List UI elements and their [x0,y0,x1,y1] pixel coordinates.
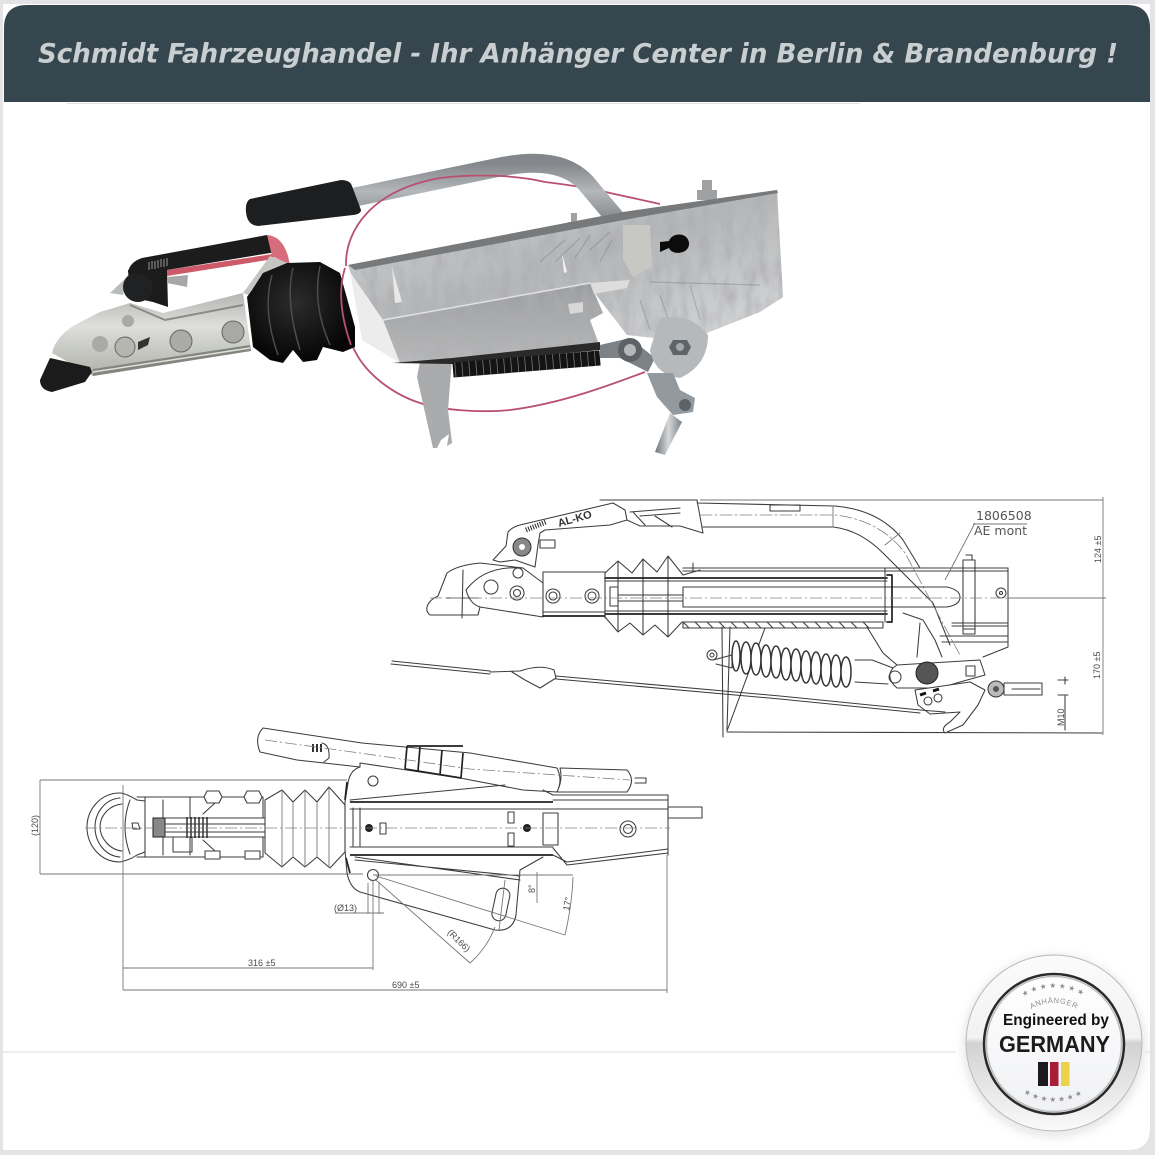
hex bolts [204,791,262,859]
vertical dimension lines [700,497,1106,735]
badge inner face [984,974,1124,1114]
bellows [605,556,683,637]
engineered by: Engineered by [1003,1012,1109,1029]
dimension 316: 316 ±5 [248,958,275,968]
brake linkage and hub [600,317,708,455]
dimension 17 degrees: 17° [561,896,573,911]
bellows ribs [268,266,330,355]
ball cup [87,793,145,862]
coupling head outline [427,563,605,618]
top stars: ★★★★★★★ [1022,982,1084,996]
part number callout [945,508,1032,580]
weld pocket [623,225,652,277]
brake lever assembly [889,660,1042,733]
badge silver ring [966,955,1142,1131]
centre shaft [153,817,287,852]
keyhole slot [660,234,689,253]
housing top face [348,190,778,270]
drawbar tube and housing [605,555,1008,665]
brand mark: AL-KO [557,509,594,530]
coupling housing [125,797,263,857]
angle construction lines [373,872,573,963]
german flag bars [1038,1062,1070,1086]
handbrake black grip [246,180,361,226]
part number callout: 1806508 [976,508,1032,523]
dimension 316 [123,785,373,990]
technical drawing: top view [30,728,702,993]
housing surface marks [383,232,760,330]
coupling head [52,293,251,376]
technical drawing: side view [391,497,1106,737]
dimension 690: 690 ±5 [392,980,419,990]
handbrake lever [600,500,960,655]
housing left white edge [350,272,400,363]
diameter 13 dimension [334,883,384,914]
handbrake lever tube [355,163,622,226]
outer dimension frame [40,780,363,874]
dimension (120): (120) [30,815,40,836]
bottom stars: ★★★★★★★ [1024,1090,1081,1102]
seal badge: Engineered by Germany [961,953,1147,1139]
coupling bolts [92,315,244,357]
dimension 690 [123,855,667,993]
cable over bellows [341,268,351,345]
pivot knob and tip [110,270,188,307]
dimension 124: 124 ±5 [1093,536,1103,563]
diameter 13 dimension: (Ø13) [334,903,357,913]
handbrake lever top view [258,728,646,792]
coupling hand lever [128,235,290,276]
return spring [392,342,600,370]
part number callout: AE mont [974,523,1027,538]
breakaway cable [391,661,945,713]
dimension M10: M10 [1056,708,1066,726]
centre line [85,827,670,829]
product photo: galvanised overrun brake coupling [40,163,783,455]
title: Schmidt Fahrzeughandel - Ihr Anhänger Center in Berlin & Brandenburg ! [38,38,1118,70]
coupling ridges and rim [93,305,251,376]
curved label: ANHÄNGER [1031,996,1078,1009]
compression spring [707,641,893,687]
dimension 8 degrees: 8° [527,884,537,893]
dimension R166: (R166) [446,927,472,954]
frame holes and fasteners [365,776,702,880]
bellows [265,787,345,868]
rubber bellows [247,262,355,363]
slotted hole [491,887,511,922]
dimension 170: 170 ±5 [1092,652,1102,679]
germany: GERMANY [999,1031,1110,1057]
galvanised drawbar housing [348,190,783,448]
strut [722,627,1102,737]
axis centre line [430,597,1105,599]
hand lever with brand [493,503,627,567]
collar between coupling and bellows [243,256,290,296]
upper brake cable over tube [346,175,545,266]
header banner [4,5,1150,102]
mounting bolts [568,180,717,226]
lower and rear brake cable [353,182,660,411]
rubber nose [40,358,92,392]
frame housing [345,767,668,930]
